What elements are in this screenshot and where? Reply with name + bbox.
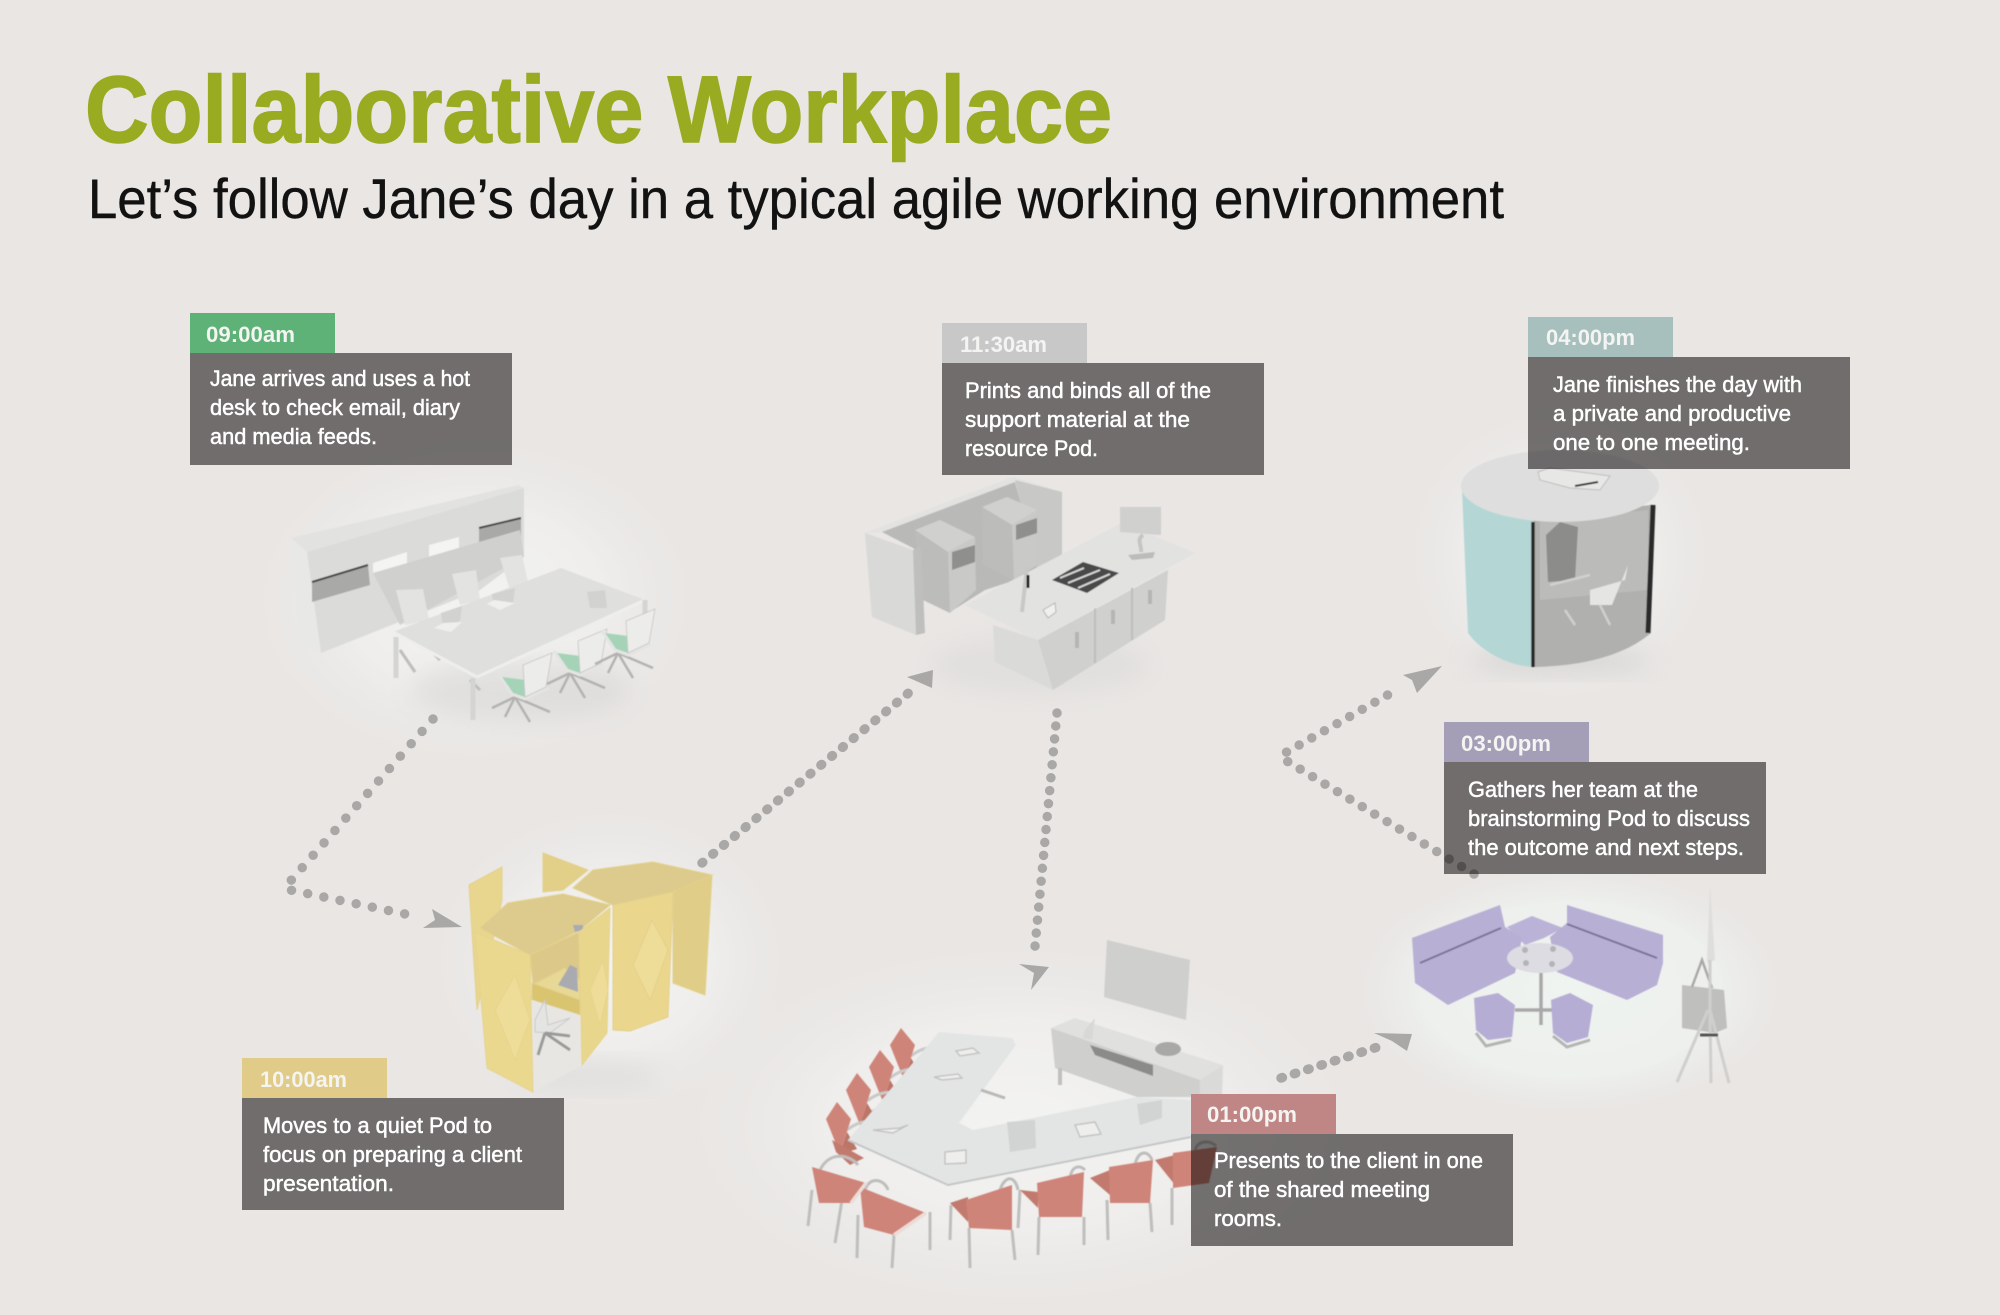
caption: 10:00am [242, 1058, 564, 1210]
dotted arrow: 09:00am to 10:00am [286, 719, 462, 928]
description: hot desk: Jane arrives and uses a hot [210, 366, 471, 391]
description: brainstorming pod: the outcome and next steps. [1468, 835, 1744, 860]
description: quiet pod: focus on preparing a client [263, 1142, 523, 1167]
description: brainstorming pod: brainstorming Pod to discuss [1468, 806, 1750, 831]
description: brainstorming pod: Gathers her team at the [1468, 777, 1698, 802]
description: brainstorming pod [1444, 762, 1766, 874]
description: private meeting [1528, 357, 1850, 469]
time tab: 03:00pm [1444, 722, 1589, 762]
dotted arrow: 03:00pm to 04:00pm [1282, 666, 1474, 874]
caption: 03:00pm [1444, 722, 1766, 874]
description: hot desk: and media feeds. [210, 424, 377, 449]
time tab: 04:00pm: 04:00pm [1546, 325, 1635, 350]
description: hot desk: desk to check email, diary [210, 395, 461, 420]
caption: 01:00pm [1191, 1094, 1513, 1246]
description: resource pod [942, 363, 1264, 475]
description: hot desk [190, 353, 512, 465]
time tab: 09:00am: 09:00am [206, 322, 295, 347]
description: quiet pod: presentation. [263, 1171, 394, 1196]
time tab: 10:00am [242, 1058, 387, 1098]
dotted arrow: 01:00pm to 03:00pm [1281, 1033, 1412, 1078]
description: resource pod: Prints and binds all of the [965, 378, 1211, 403]
caption: 11:30am [942, 323, 1264, 475]
time tab: 11:30am: 11:30am [960, 332, 1047, 357]
time tab: 04:00pm [1528, 317, 1673, 357]
subtitle: Let’s follow Jane’s day in a typical agile working environment [88, 167, 1504, 230]
dotted arrow: 11:30am to 01:00pm [1019, 713, 1057, 990]
dotted arrow: 10:00am to 11:30am [702, 670, 933, 863]
description: private meeting: Jane finishes the day with [1553, 372, 1802, 397]
description: private meeting: one to one meeting. [1553, 430, 1750, 455]
description: resource pod: resource Pod. [965, 436, 1098, 461]
caption: 09:00am [190, 313, 512, 465]
time tab: 09:00am [190, 313, 335, 353]
description: quiet pod: Moves to a quiet Pod to [263, 1113, 492, 1138]
time tab: 01:00pm: 01:00pm [1207, 1102, 1297, 1127]
time tab: 10:00am: 10:00am [260, 1067, 347, 1092]
description: meeting room: Presents to the client in one [1214, 1148, 1483, 1173]
illustration: quiet pod [430, 805, 790, 1115]
caption: 04:00pm [1528, 317, 1850, 469]
illustration: meeting room [680, 940, 1360, 1310]
time tab: 11:30am [942, 323, 1087, 363]
description: meeting room: rooms. [1214, 1206, 1282, 1231]
description: meeting room [1191, 1134, 1513, 1246]
title: Collaborative Workplace [85, 57, 1112, 163]
illustration: hot desk [250, 435, 700, 765]
illustration: private pod [1405, 405, 1715, 705]
illustration: brainstorming pod [1355, 865, 1785, 1115]
description: quiet pod [242, 1098, 564, 1210]
description: private meeting: a private and productive [1553, 401, 1791, 426]
description: resource pod: support material at the [965, 407, 1190, 432]
illustration: resource pod [865, 477, 1195, 695]
time tab: 03:00pm: 03:00pm [1461, 731, 1551, 756]
description: meeting room: of the shared meeting [1214, 1177, 1430, 1202]
time tab: 01:00pm [1191, 1094, 1336, 1134]
